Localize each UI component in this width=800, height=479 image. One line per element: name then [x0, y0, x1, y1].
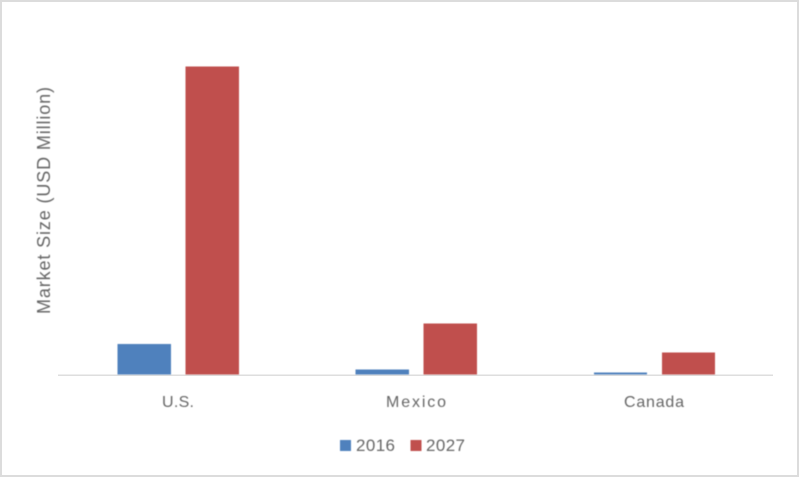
bars: Mexico [356, 324, 477, 374]
legend text 2016: 2016 [356, 436, 395, 455]
bar: U.S. 2016 [118, 344, 171, 374]
bars: U.S. [118, 66, 239, 374]
legend text 2027: 2027 [426, 436, 465, 455]
category labels [162, 394, 684, 411]
label: U.S.: U.S. [162, 394, 194, 411]
legend swatch 2016 [340, 440, 351, 451]
legend [340, 436, 465, 455]
bar: U.S. 2027 [186, 66, 239, 374]
bar: Mexico 2027 [424, 324, 477, 374]
label: Canada: Canada [624, 394, 684, 411]
bar: Canada 2016 [594, 372, 647, 374]
bar: Canada 2027 [662, 352, 715, 374]
x axis line [58, 374, 773, 376]
label: Mexico: Mexico [386, 394, 446, 411]
bars: Canada [594, 352, 715, 374]
y axis title: Market Size (USD Million) [34, 87, 54, 314]
legend swatch 2027 [410, 440, 422, 451]
bar: Mexico 2016 [356, 370, 409, 374]
